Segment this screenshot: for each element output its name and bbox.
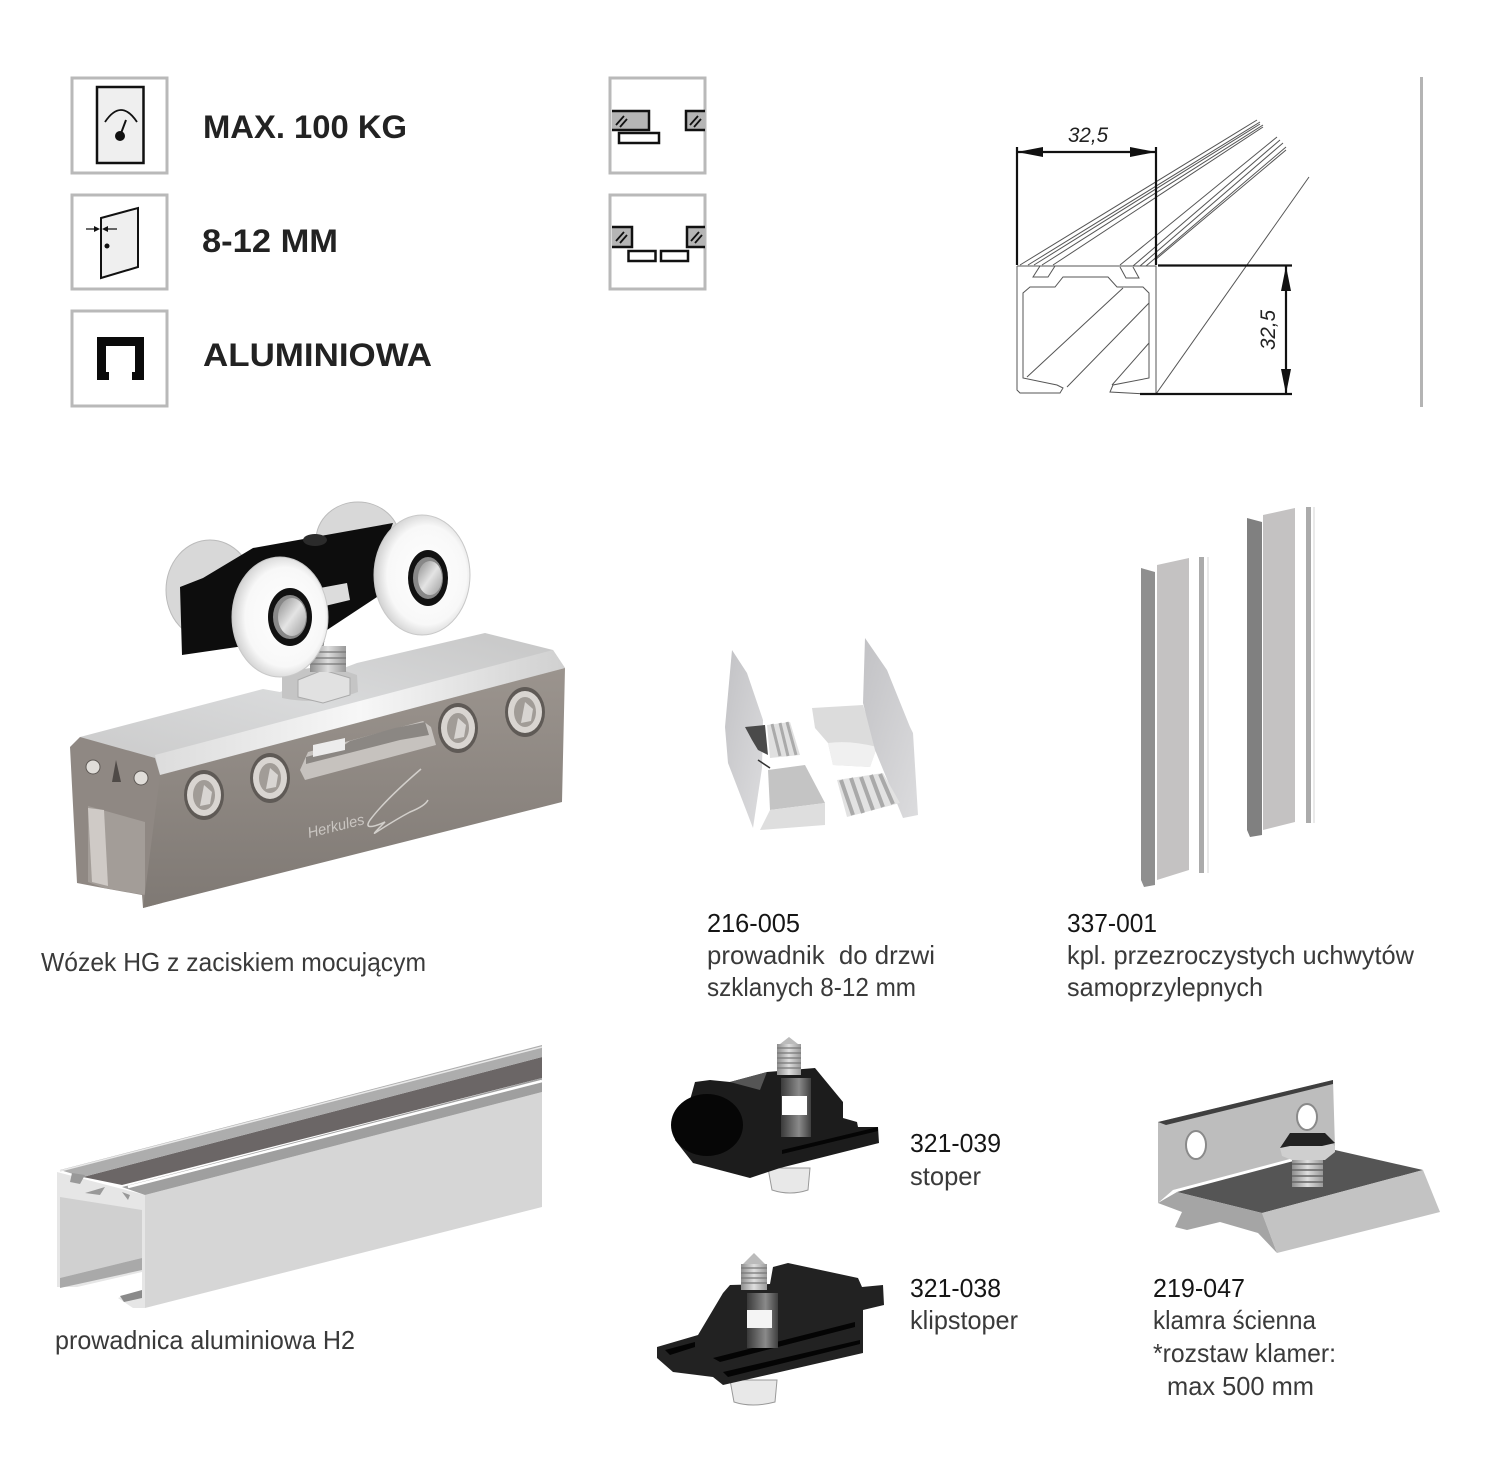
heading: glass thickness: 8-12 MM [202, 223, 338, 259]
icon: aluminium profile [72, 311, 167, 406]
tall handle [1247, 507, 1314, 837]
caption: handles [1067, 908, 1414, 1002]
caption: wall clamp [1153, 1273, 1336, 1401]
logo signature: Herkules [306, 811, 367, 842]
product image: clip stopper 321-038 [657, 1253, 884, 1405]
caption: stopper: stoper [910, 1161, 981, 1191]
body top face [80, 633, 565, 775]
caption: carriage: Wózek HG z zaciskiem mocującym [41, 947, 426, 977]
caption: handles: 337-001 [1067, 908, 1157, 938]
threaded stud and nut [282, 646, 358, 703]
caption: guide: szklanych 8-12 mm [707, 972, 916, 1002]
heading: max load: MAX. 100 KG [203, 109, 407, 145]
caption: wall clamp: klamra ścienna [1153, 1305, 1316, 1335]
caption: guide: prowadnik do drzwi [707, 940, 935, 970]
caption: handles: kpl. przezroczystych uchwytów [1067, 940, 1414, 970]
front wheels [232, 515, 470, 677]
product image: wall clamp [1158, 1080, 1440, 1253]
rear wheels [166, 502, 400, 640]
dimension: height: 32,5 [1257, 310, 1280, 350]
caption: stopper [910, 1128, 1001, 1191]
dimension: width: 32,5 [1068, 124, 1108, 147]
caption: wall clamp: *rozstaw klamer: [1153, 1338, 1336, 1368]
icon: max load gauge [72, 78, 167, 173]
guide right part [812, 638, 918, 818]
black wheel block [180, 523, 393, 655]
vertical divider [1420, 77, 1423, 407]
short handle [1141, 557, 1208, 887]
product image: stopper 321-039 [671, 1037, 879, 1193]
caption: handles: samoprzylepnych [1067, 972, 1263, 1002]
product image: glass door guide [725, 638, 918, 830]
slot [300, 721, 436, 780]
icon: glass thickness [72, 195, 167, 289]
caption: clip stopper [910, 1273, 1018, 1335]
caption: guide: 216-005 [707, 908, 800, 938]
caption: clip stopper: 321-038 [910, 1273, 1001, 1303]
product image: carriage with clamp [70, 502, 565, 908]
logo signature [306, 769, 428, 842]
bolts [184, 687, 545, 820]
icon: single door configuration [610, 78, 705, 173]
product image: adhesive handles [1141, 507, 1314, 887]
caption: wall clamp: max 500 mm [1167, 1371, 1314, 1401]
caption: clip stopper: klipstoper [910, 1305, 1018, 1335]
caption: stopper: 321-039 [910, 1128, 1001, 1158]
chart: rail profile technical drawing [1017, 120, 1309, 394]
body front face [143, 668, 565, 908]
icon: double door configuration [610, 195, 705, 289]
caption: wall clamp: 219-047 [1153, 1273, 1245, 1303]
caption: rail: prowadnica aluminiowa H2 [55, 1325, 355, 1355]
product image: aluminium rail H2 [57, 1045, 542, 1308]
heading: material: ALUMINIOWA [203, 337, 432, 373]
guide left part [725, 650, 825, 830]
caption: guide [707, 908, 935, 1002]
body end face [70, 737, 162, 908]
